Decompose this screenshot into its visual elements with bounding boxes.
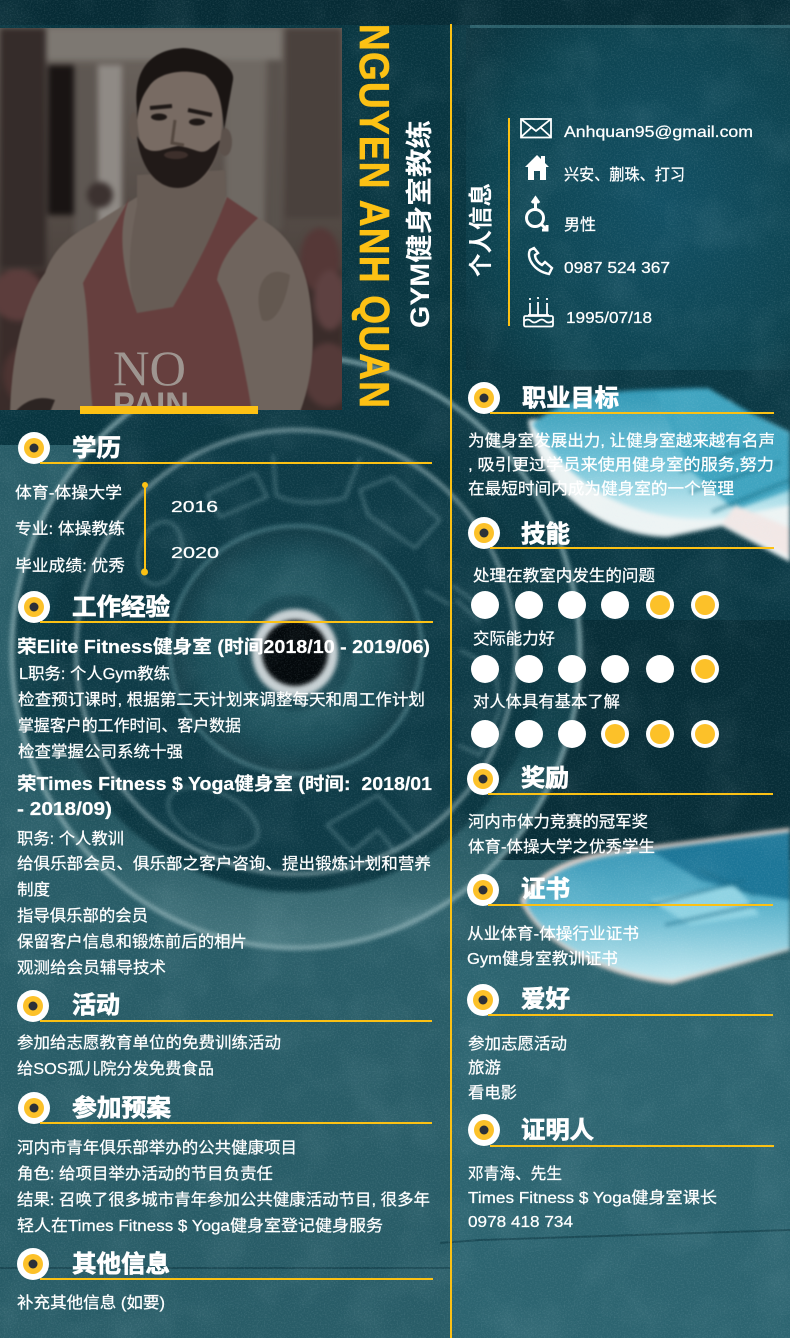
reference lines: Times Fitness $ Yoga健身室课长 xyxy=(468,1189,717,1207)
heading icon xyxy=(18,591,50,623)
profile photo xyxy=(0,28,353,424)
job one duties: 掌握客户的工作时间、客户数据 xyxy=(18,717,241,735)
icon: phone xyxy=(529,248,552,274)
personal info divider xyxy=(508,118,510,326)
panel: education xyxy=(15,432,432,576)
plate lettering xyxy=(131,455,500,862)
heading icon xyxy=(17,990,49,1022)
activity lines: 给SOS孤儿院分发免费食品 xyxy=(17,1060,214,1078)
heading rule xyxy=(488,793,773,795)
shirt print: PAIN xyxy=(113,386,189,424)
icon: house xyxy=(525,155,549,180)
heading icon xyxy=(18,432,50,464)
major: 专业: 体操教练 xyxy=(15,520,125,538)
panel: certificates xyxy=(467,874,773,968)
panel: awards xyxy=(467,763,773,856)
icon: envelope xyxy=(521,119,551,138)
job two title: 荣Times Fitness $ Yoga健身室 (时间: 2018/01 xyxy=(17,773,432,794)
hobby lines xyxy=(468,1035,567,1102)
birth date: 1995/07/18 xyxy=(566,310,652,327)
grade: 毕业成绩: 优秀 xyxy=(15,557,125,575)
heading rule xyxy=(490,1145,774,1147)
heading: 活动 xyxy=(72,992,120,1019)
job two duties xyxy=(17,830,431,977)
project lines xyxy=(17,1139,430,1235)
goal text: , 吸引更过学员来使用健身室的服务,努力 xyxy=(468,456,774,474)
shirt print: NO xyxy=(113,340,186,396)
heading: 其他信息 xyxy=(72,1251,170,1278)
heading: 工作经验 xyxy=(72,593,170,621)
heading rule xyxy=(40,462,432,464)
other text: 补充其他信息 (如要) xyxy=(17,1294,165,1312)
skill three rating xyxy=(471,720,719,748)
phone: 0987 524 367 xyxy=(564,260,670,277)
job one duties xyxy=(18,665,425,761)
photo accent bar xyxy=(80,406,258,414)
panel: hobbies xyxy=(467,984,773,1102)
heading rule xyxy=(40,1122,432,1124)
panel: skills xyxy=(468,517,774,748)
heading icon xyxy=(468,517,500,549)
job one duties: 检查掌握公司系统十强 xyxy=(18,743,183,761)
school: 体育-体操大学 xyxy=(15,484,122,502)
goal text: 在最短时间内成为健身室的一个管理 xyxy=(468,480,734,498)
main vertical divider xyxy=(450,24,452,1338)
bottom shoe xyxy=(520,828,790,984)
heading: 学历 xyxy=(72,435,121,462)
heading icon xyxy=(18,1092,50,1124)
goal text: 为健身室发展出力, 让健身室越来越有名声 xyxy=(468,432,775,450)
floor creases xyxy=(0,1230,790,1268)
name vertical: NGUYEN ANH QUAN xyxy=(350,24,397,408)
award lines xyxy=(468,812,655,856)
skill two rating xyxy=(471,655,719,683)
panel: activities xyxy=(17,990,432,1078)
skill one label: 处理在教室内发生的问题 xyxy=(473,567,655,585)
project lines: 河内市青年俱乐部举办的公共健康项目 xyxy=(17,1139,297,1157)
hobby lines: 旅游 xyxy=(468,1059,501,1077)
address: 兴安、蒯珠、打习 xyxy=(564,166,685,184)
heading rule xyxy=(40,1020,432,1022)
certificate lines xyxy=(467,925,639,968)
heading rule xyxy=(40,1278,433,1280)
job two duties: 职务: 个人教训 xyxy=(17,830,124,848)
gender: 男性 xyxy=(564,216,596,234)
job two duties: 制度 xyxy=(17,881,50,899)
activity lines xyxy=(17,1034,281,1078)
heading: 证明人 xyxy=(521,1117,594,1144)
hobby lines: 参加志愿活动 xyxy=(468,1035,567,1053)
timeline xyxy=(141,482,148,576)
heading icon xyxy=(467,984,499,1016)
reference lines xyxy=(468,1165,717,1231)
heading icon xyxy=(467,874,499,906)
certificate lines: Gym健身室教训证书 xyxy=(467,950,618,968)
job one duties: 检查预订课时, 根据第二天计划来调整每天和周工作计划 xyxy=(18,691,425,709)
skill one rating xyxy=(471,591,719,619)
top shoe xyxy=(528,400,790,562)
panel: other information xyxy=(17,1248,433,1312)
job two title xyxy=(17,773,432,819)
award lines: 体育-体操大学之优秀学生 xyxy=(468,838,655,856)
heading icon xyxy=(468,1114,500,1146)
heading rule xyxy=(490,412,774,414)
heading: 爱好 xyxy=(521,986,570,1013)
job two duties: 指导俱乐部的会员 xyxy=(17,907,148,925)
personal info label: 个人信息 xyxy=(468,183,495,277)
end year: 2020 xyxy=(171,545,219,562)
heading rule xyxy=(488,1014,773,1016)
activity lines: 参加给志愿教育单位的免费训练活动 xyxy=(17,1034,281,1052)
plate body xyxy=(12,356,580,948)
heading: 技能 xyxy=(521,521,570,548)
heading icon xyxy=(467,763,499,795)
hobby lines: 看电影 xyxy=(468,1084,517,1102)
job one duties: L职务: 个人Gym教练 xyxy=(19,665,170,683)
panel: projects xyxy=(17,1092,432,1235)
job two title: - 2018/09) xyxy=(17,799,112,819)
skill three label: 对人体具有基本了解 xyxy=(473,693,620,711)
panel: references xyxy=(468,1114,774,1231)
heading rule xyxy=(40,621,433,623)
heading icon xyxy=(468,382,500,414)
job two duties: 保留客户信息和锻炼前后的相片 xyxy=(17,933,247,951)
heading: 奖励 xyxy=(521,765,569,792)
goal text xyxy=(468,432,775,498)
skill two label: 交际能力好 xyxy=(473,630,555,648)
panel: work experience xyxy=(17,591,433,977)
heading: 职业目标 xyxy=(522,385,619,412)
job one title: 荣Elite Fitness健身室 (时间2018/10 - 2019/06) xyxy=(17,636,430,657)
project lines: 轻人在Times Fitness $ Yoga健身室登记健身服务 xyxy=(17,1217,383,1235)
heading icon xyxy=(17,1248,49,1280)
heading: 参加预案 xyxy=(72,1094,171,1122)
award lines: 河内市体力竞赛的冠军奖 xyxy=(468,812,648,831)
job two duties: 给俱乐部会员、俱乐部之客户咨询、提出锻炼计划和营养 xyxy=(17,855,431,873)
panel: contact details xyxy=(521,119,753,327)
icon: gender xyxy=(526,198,547,230)
project lines: 角色: 给项目举办活动的节目负责任 xyxy=(17,1165,273,1183)
heading rule xyxy=(488,904,773,906)
start year: 2016 xyxy=(171,499,218,516)
certificate lines: 从业体育-体操行业证书 xyxy=(467,925,639,943)
reference lines: 0978 418 734 xyxy=(468,1214,573,1231)
reference lines: 邓青海、先生 xyxy=(468,1165,562,1183)
panel: career goal xyxy=(468,382,775,498)
heading rule xyxy=(490,547,774,549)
person xyxy=(10,48,313,412)
email: Anhquan95@gmail.com xyxy=(564,124,753,141)
icon: cake xyxy=(524,297,553,326)
shirt print xyxy=(114,352,187,406)
job two duties: 观测给会员辅导技术 xyxy=(17,959,166,977)
heading: 证书 xyxy=(521,876,570,903)
project lines: 结果: 召唤了很多城市青年参加公共健康活动节目, 很多年 xyxy=(17,1191,430,1209)
job title vertical: GYM健身室教练 xyxy=(405,120,435,328)
